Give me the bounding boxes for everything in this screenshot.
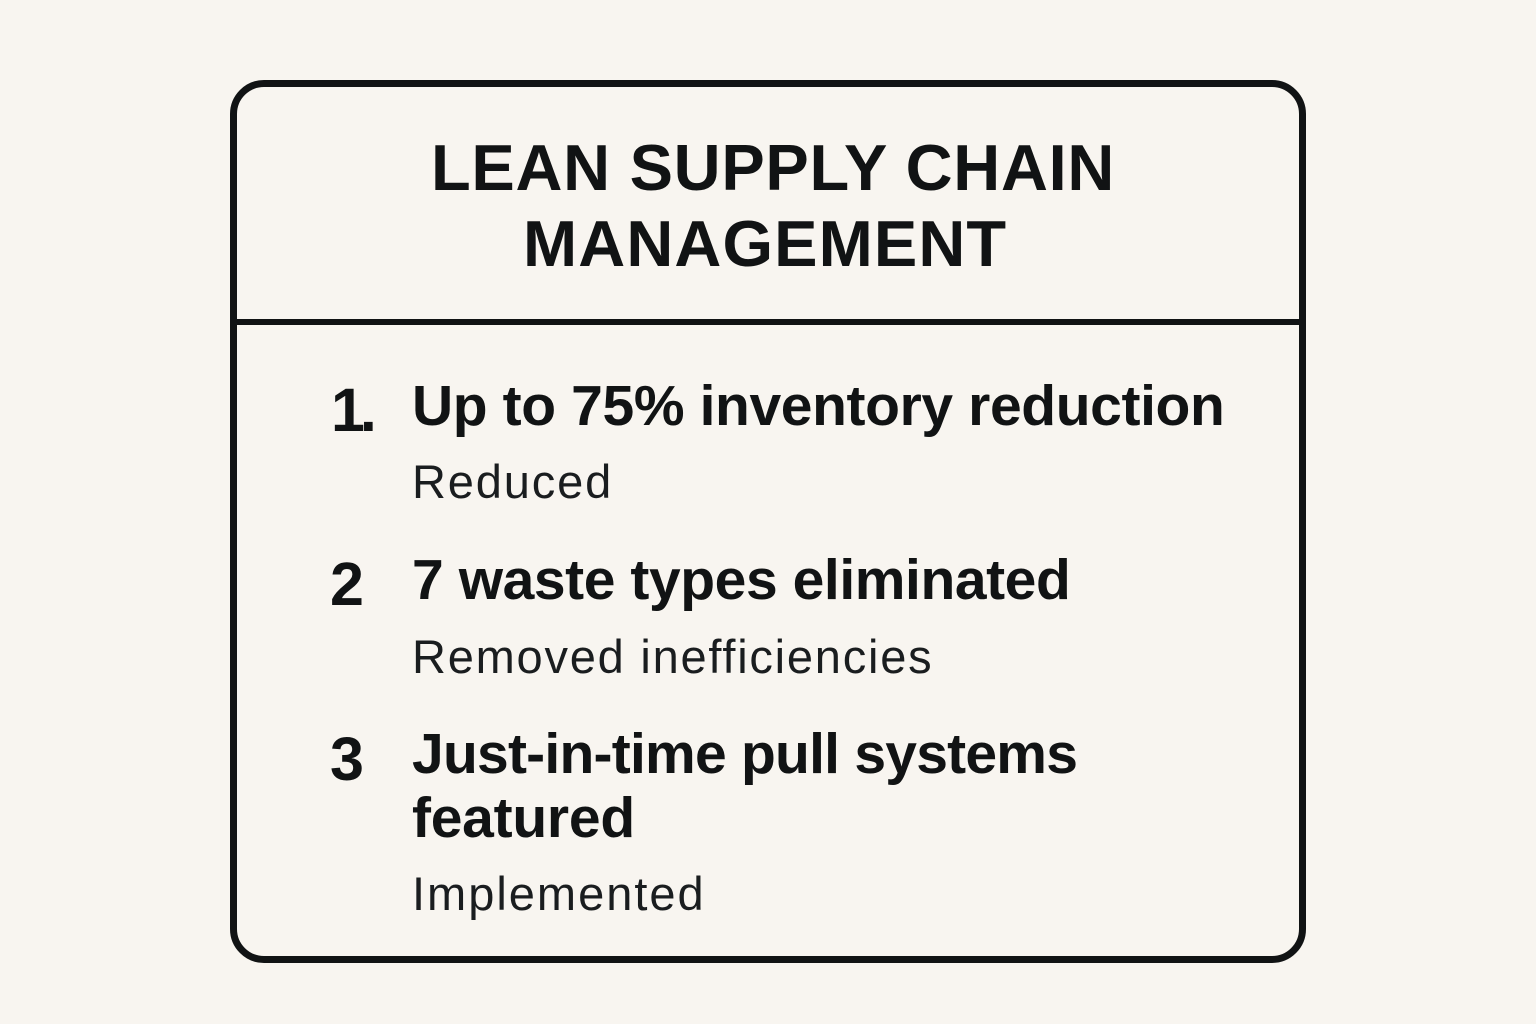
number 3: 3 <box>330 725 364 793</box>
title line 2: MANAGEMENT <box>523 207 1007 280</box>
number 2: 2 <box>330 550 364 618</box>
item 1 heading: Up to 75% inventory reduction <box>412 374 1224 438</box>
number 1: 1. <box>331 376 372 444</box>
item 1 description: Reduced <box>412 455 613 508</box>
title line 1: LEAN SUPPLY CHAIN <box>431 131 1115 204</box>
item 3 description: Implemented <box>412 867 706 920</box>
item 3 heading line 1: Just-in-time pull systems <box>412 722 1077 786</box>
heading: title <box>431 131 1115 280</box>
item 3 heading <box>412 722 1077 850</box>
item 2 heading: 7 waste types eliminated <box>412 548 1070 612</box>
item 3 heading line 2: featured <box>412 786 635 850</box>
divider under title <box>236 319 1300 325</box>
panel: main card <box>230 80 1306 963</box>
item 2 description: Removed inefficiencies <box>412 630 933 683</box>
